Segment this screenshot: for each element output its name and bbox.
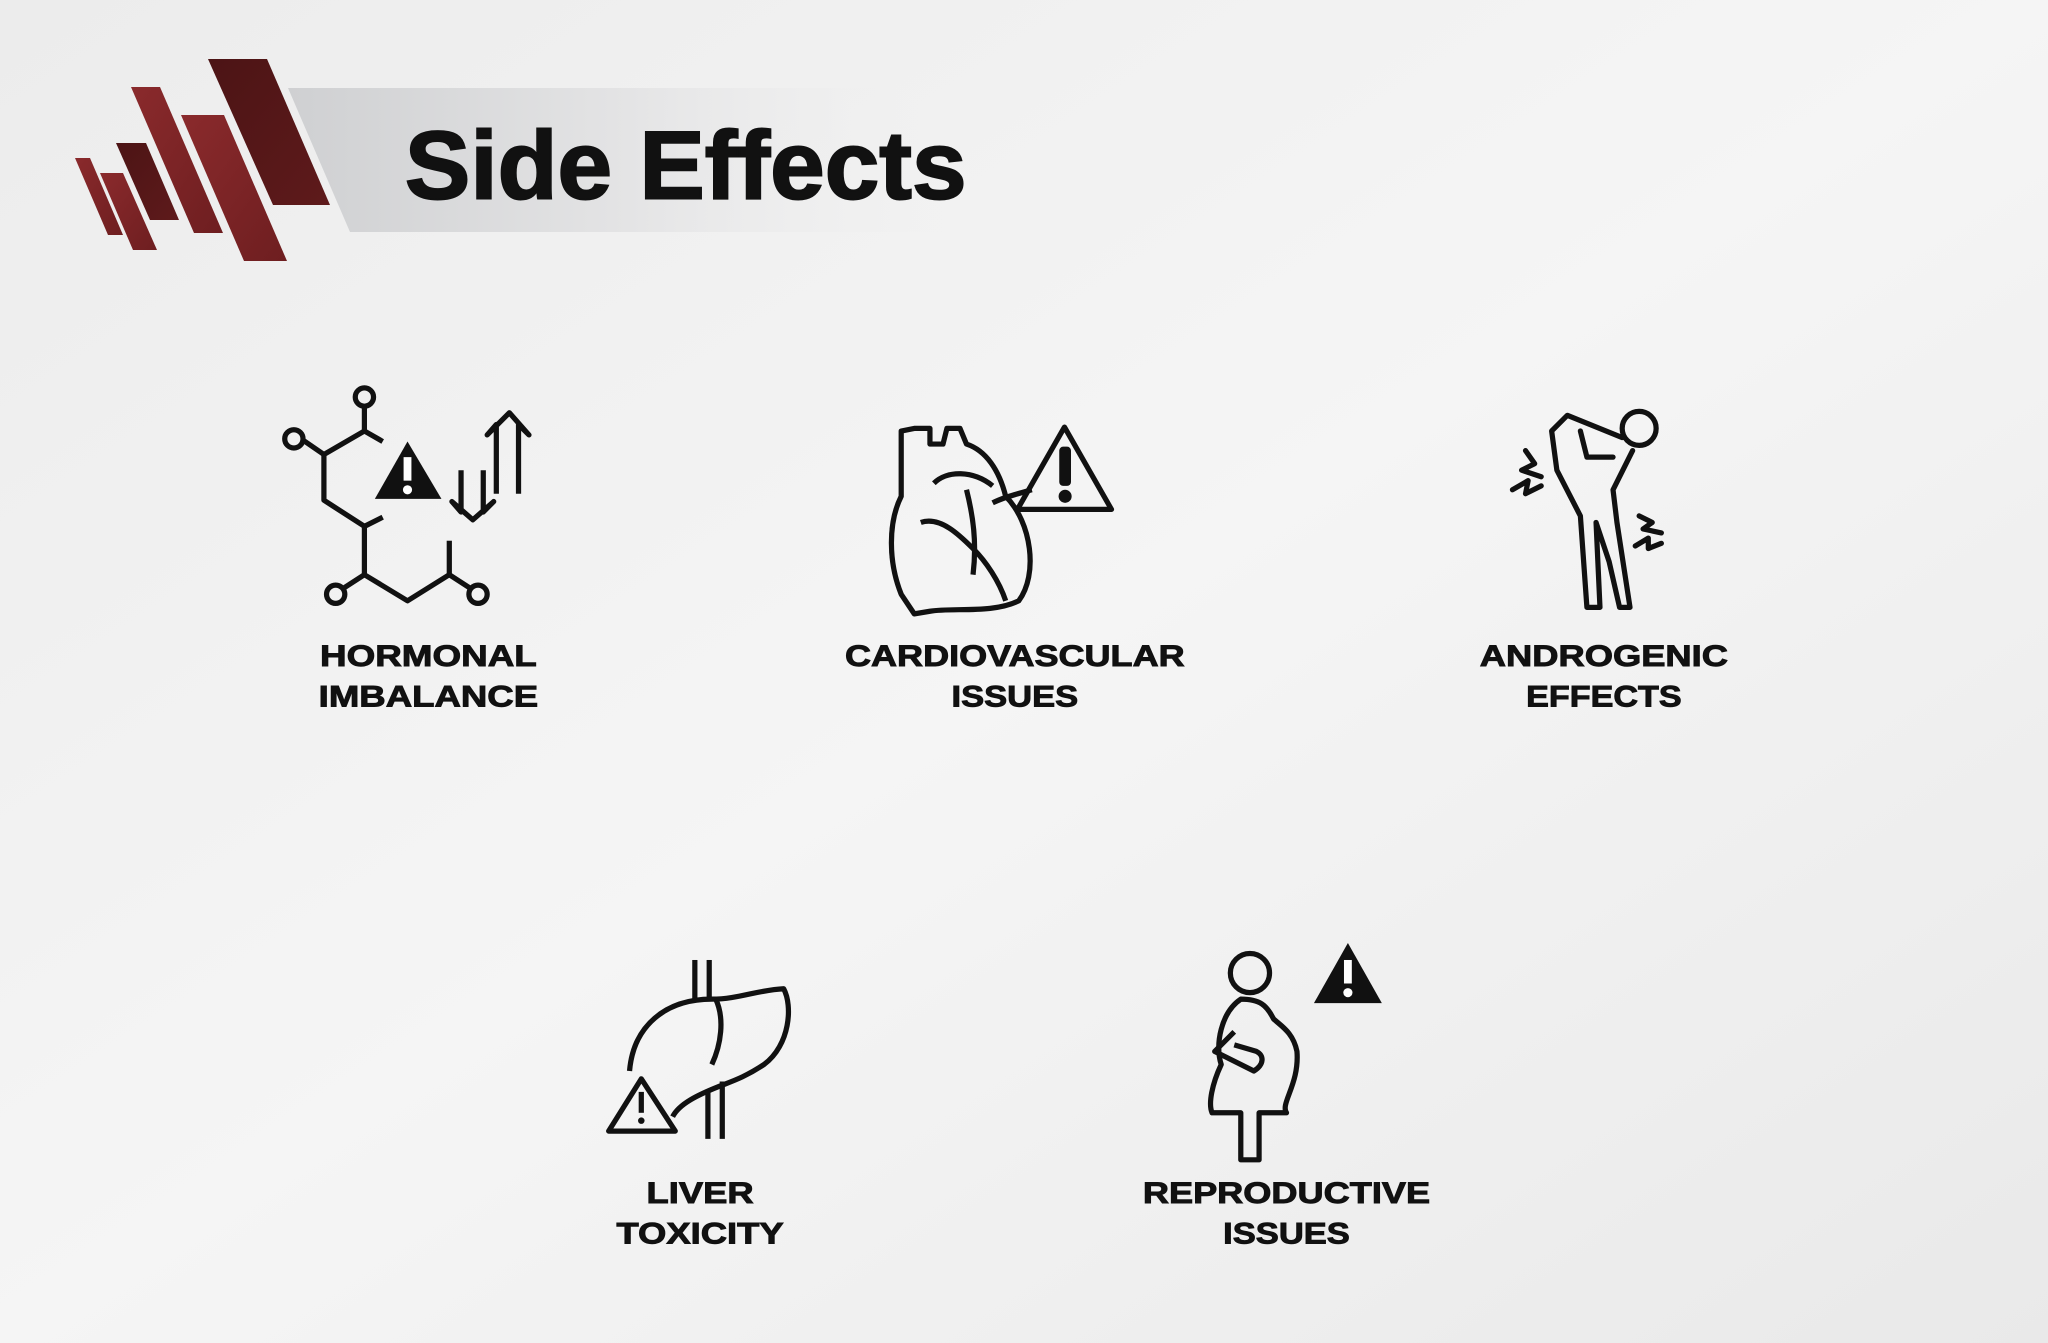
header logo (75, 59, 970, 261)
label: ANDROGENIC (1480, 640, 1728, 673)
item: reproductive issues (1143, 943, 1430, 1250)
item: liver toxicity (609, 960, 788, 1250)
icon: molecule (285, 388, 529, 603)
item: androgenic effects: EFFECTS (1526, 681, 1682, 714)
title: Side Effects (405, 113, 967, 220)
label: LIVER (647, 1177, 754, 1210)
icon: person with back pain (1512, 411, 1661, 607)
item: hormonal imbalance (285, 388, 538, 714)
label: CARDIOVASCULAR (845, 640, 1185, 673)
item: reproductive issues: ISSUES (1223, 1217, 1350, 1250)
icon: pregnant woman with warning (1211, 953, 1297, 1160)
item: liver toxicity: TOXICITY (616, 1217, 784, 1250)
item: androgenic effects (1480, 411, 1728, 714)
item: cardiovascular issues: ISSUES (951, 681, 1078, 714)
item: cardiovascular issues (845, 427, 1185, 714)
icon: heart with warning (891, 427, 1111, 614)
label: HORMONAL (320, 640, 537, 673)
label: REPRODUCTIVE (1143, 1177, 1430, 1210)
item: hormonal imbalance: IMBALANCE (319, 681, 538, 714)
icon: liver with warning (609, 960, 788, 1139)
